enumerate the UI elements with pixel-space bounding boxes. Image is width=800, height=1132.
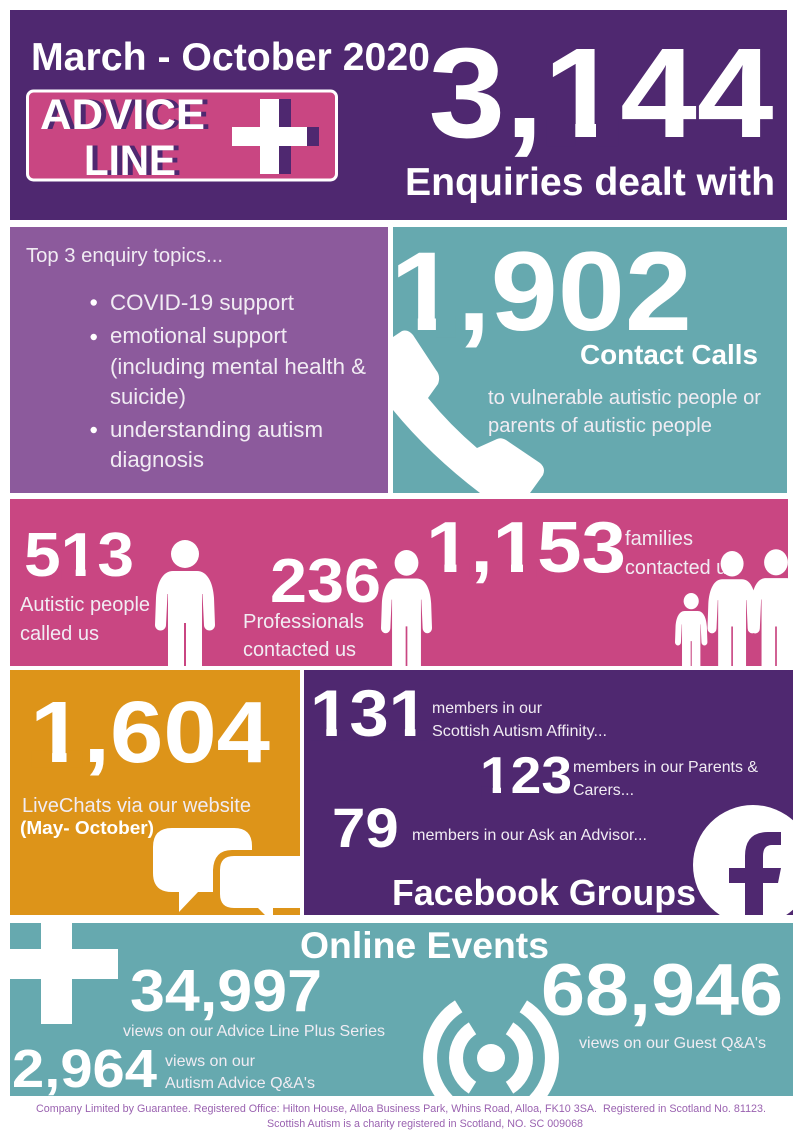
bullet list: understanding autism <box>110 417 323 442</box>
panel: live chats <box>10 670 304 916</box>
icon: Facebook logo <box>693 805 793 915</box>
panel: online events <box>10 923 793 1110</box>
footer: company information: Company Limited by Guarantee. Registered Office: Hilton House, Alloa Business Park, Whins Road, Alloa, FK10 3SA. Registered in Scotland No. 81123. <box>36 1103 766 1115</box>
panel: Facebook groups <box>304 670 800 925</box>
logo: Advice Line plus: ADVICE <box>45 91 210 139</box>
stat: 1,153 families: families <box>625 528 693 550</box>
stat: 1,153 families <box>426 508 737 588</box>
stat: 1,153 families: 1,153 <box>426 508 626 588</box>
panel: contact calls <box>390 227 787 493</box>
caption: enquiries dealt with: Enquiries dealt with <box>405 161 775 204</box>
stat: 513 autistic people: Autistic people <box>20 594 150 616</box>
description: contact calls <box>488 387 761 437</box>
bullet list: suicide) <box>110 384 186 409</box>
logo: Advice Line plus: ADVICE <box>40 91 205 139</box>
stat: 123 members: members in our Parents & <box>573 759 758 776</box>
caption: live chats: LiveChats via our website <box>22 795 251 817</box>
stat: 68,946 views: 68,946 <box>541 950 783 1031</box>
bullet list: COVID-19 support <box>110 290 295 315</box>
heading: contact calls: Contact Calls <box>580 339 758 370</box>
icon: telephone handset <box>393 330 544 493</box>
stat: 236 professionals <box>243 547 381 661</box>
stat: 1,153 families: contacted us <box>625 557 737 579</box>
bullet list <box>90 290 366 472</box>
stat: 2,964 views: views on our <box>165 1053 256 1070</box>
stat: 236 professionals: Professionals <box>243 611 364 633</box>
description: contact calls: to vulnerable autistic people or <box>488 387 761 409</box>
title: date range: March - October 2020 <box>31 36 430 79</box>
caption: May to October: (May- October) <box>20 817 154 838</box>
stat: 34,997 views: 34,997 <box>130 958 322 1024</box>
stat: 2,964 views: Autism Advice Q&A's <box>165 1075 315 1092</box>
icon: person <box>155 540 215 667</box>
logo: Advice Line plus: LINE <box>89 137 181 185</box>
icon: family <box>675 549 788 666</box>
icon: broadcast signal <box>430 1006 552 1110</box>
icon: person <box>381 550 432 667</box>
stat: 2,964 views: 2,964 <box>12 1039 157 1099</box>
stat: 79 members <box>332 796 647 859</box>
big number: 3,144: 3,144 <box>428 22 774 165</box>
bullet list: emotional support <box>110 323 288 348</box>
heading: top 3 topics: Top 3 enquiry topics... <box>26 245 223 267</box>
heading: Facebook Groups: Facebook Groups <box>392 872 696 913</box>
icon: plus <box>10 923 118 1024</box>
stat: 513 autistic people: 513 <box>24 521 134 590</box>
stat: 131 members: Scottish Autism Affinity... <box>432 723 607 740</box>
bullet list: (including mental health & <box>110 354 366 379</box>
big number: 1,604: 1,604 <box>30 684 270 781</box>
logo: Advice Line plus <box>28 91 336 185</box>
stat: 79 members: 79 <box>332 796 399 859</box>
footer: company information: Scottish Autism is a charity registered in Scotland, NO. SC 009068 <box>267 1118 583 1130</box>
logo: Advice Line plus: LINE <box>84 137 176 185</box>
stat: 123 members: 123 <box>480 747 572 805</box>
stat: 131 members <box>310 676 607 750</box>
stat: 123 members <box>480 747 758 805</box>
footer: company information <box>36 1103 766 1130</box>
panel: header <box>10 10 787 220</box>
panel: top 3 enquiry topics <box>10 227 388 493</box>
stat: 79 members: members in our Ask an Advisor... <box>412 827 647 844</box>
panel: people who contacted us <box>10 499 800 667</box>
stat: 68,946 views: views on our Guest Q&A's <box>579 1035 766 1052</box>
stat: 236 professionals: contacted us <box>243 639 356 661</box>
stat: 123 members: Carers... <box>573 782 634 799</box>
description: contact calls: parents of autistic people <box>488 415 712 437</box>
stat: 513 autistic people <box>20 521 150 645</box>
stat: 34,997 views: views on our Advice Line Plus Series <box>123 1023 385 1040</box>
stat: 131 members: members in our <box>432 700 543 717</box>
stat: 236 professionals: 236 <box>270 547 381 616</box>
icon: chat bubbles <box>153 828 304 916</box>
heading: online events: Online Events <box>300 925 549 966</box>
big number: 1,902: 1,902 <box>390 229 692 354</box>
stat: 513 autistic people: called us <box>20 623 99 645</box>
stat: 131 members: 131 <box>310 676 428 750</box>
stat: 2,964 views <box>12 1039 315 1099</box>
bullet list: diagnosis <box>110 447 204 472</box>
stat: 34,997 views <box>123 958 385 1040</box>
